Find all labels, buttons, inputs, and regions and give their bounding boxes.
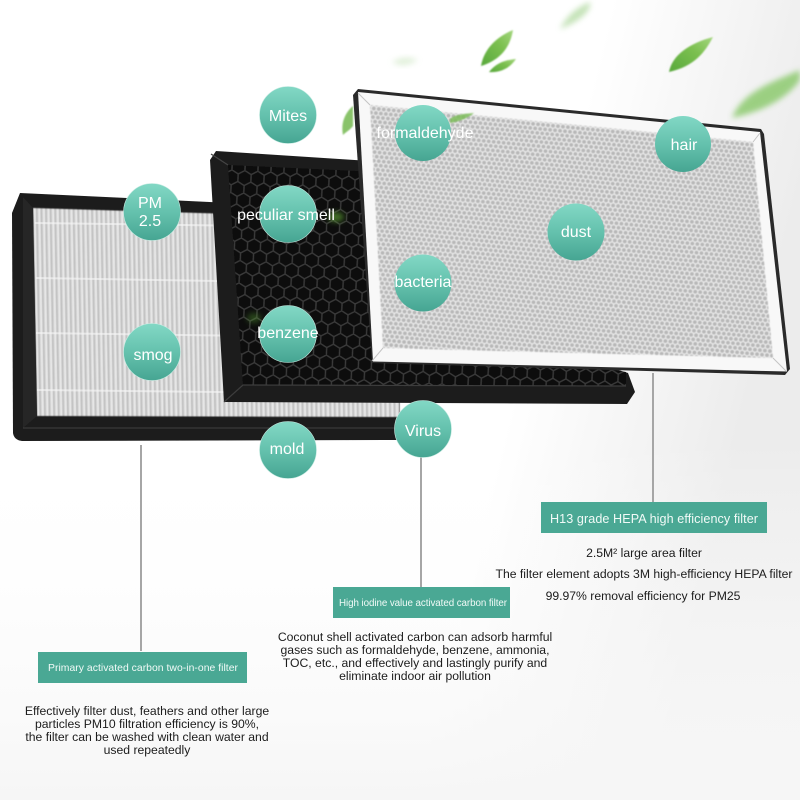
bubble: dust: dust <box>561 224 592 241</box>
label: activated carbon filter: High iodine value activated carbon filter <box>339 598 508 609</box>
description: primary filter: the filter can be washed with clean water and <box>25 730 269 744</box>
filter: high iodine value activated carbon <box>210 151 635 404</box>
description: activated carbon filter: TOC, etc., and effectively and lastingly purify and <box>283 656 547 670</box>
bubble: hair <box>655 116 711 172</box>
bubble: peculiar smell <box>237 186 335 242</box>
description: activated carbon filter <box>278 630 552 683</box>
bubble: formaldehyde: formaldehyde <box>377 125 474 142</box>
label and text: HEPA filter <box>496 502 792 603</box>
description: HEPA filter: 99.97% removal efficiency for PM25 <box>546 589 741 603</box>
label: HEPA filter <box>541 502 767 533</box>
bubble: benzene: benzene <box>257 325 319 342</box>
bubble: hair: hair <box>671 137 698 154</box>
label: activated carbon filter <box>333 587 510 618</box>
description: primary filter: used repeatedly <box>104 743 191 757</box>
description: activated carbon filter: eliminate indoor air pollution <box>339 669 491 683</box>
description: HEPA filter <box>496 546 792 603</box>
description: activated carbon filter: Coconut shell activated carbon can adsorb harmful <box>278 630 552 644</box>
bubble: Mites <box>260 86 316 144</box>
filter: primary activated carbon two-in-one <box>12 193 400 441</box>
description: primary filter: particles PM10 filtration efficiency is 90%, <box>35 717 259 731</box>
bubble: Mites: Mites <box>269 108 307 125</box>
label and text: primary filter <box>25 652 269 757</box>
label: HEPA filter: H13 grade HEPA high efficiency filter <box>550 512 758 526</box>
bubble: mold: mold <box>270 441 304 458</box>
green glows on the filters <box>247 106 474 323</box>
decorative flying leaves <box>392 2 800 118</box>
bubble: PM 2.5 <box>124 184 180 240</box>
description: HEPA filter: The filter element adopts 3M high-efficiency HEPA filter <box>496 567 792 581</box>
bubble: peculiar smell: peculiar smell <box>237 207 335 224</box>
filter: H13 HEPA high efficiency <box>353 89 790 375</box>
bubble: Virus: Virus <box>405 423 441 440</box>
description: primary filter: Effectively filter dust, feathers and other large <box>25 704 269 718</box>
label: primary filter <box>38 652 247 683</box>
description: primary filter <box>25 704 269 757</box>
connector lines <box>141 373 653 651</box>
bubble: formaldehyde <box>377 105 474 161</box>
bubble: PM 2.5: 2.5 <box>139 213 161 230</box>
label: primary filter: Primary activated carbon two-in-one filter <box>48 663 239 674</box>
bubble: smog <box>124 324 180 380</box>
label and text: activated carbon filter <box>278 587 552 683</box>
bubble: mold <box>260 422 316 478</box>
description: HEPA filter: 2.5M² large area filter <box>586 546 702 560</box>
bubble: dust <box>548 204 604 260</box>
description: activated carbon filter: gases such as formaldehyde, benzene, ammonia, <box>281 643 549 657</box>
bubble: PM 2.5: PM <box>138 195 162 212</box>
bubble: bacteria <box>394 254 452 312</box>
bubble: benzene <box>257 306 319 362</box>
bubble: bacteria: bacteria <box>395 274 452 291</box>
bubble: smog: smog <box>133 347 173 364</box>
bubble: Virus <box>394 400 452 458</box>
